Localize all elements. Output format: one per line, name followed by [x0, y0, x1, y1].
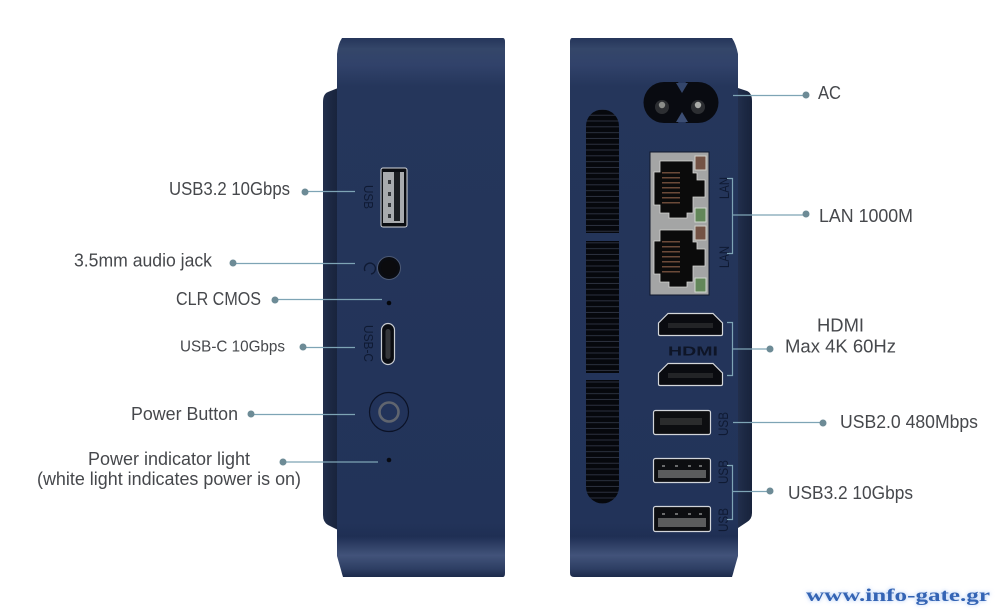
USB 3.2 port top: [654, 458, 710, 482]
rear plate right: [738, 88, 752, 528]
AC socket: [644, 82, 718, 123]
USB-C label: USB-C: [361, 325, 376, 362]
LAN ports: [650, 152, 709, 295]
headphone icon: [364, 263, 375, 274]
USB label: USB: [361, 185, 376, 209]
callout: LAN: [727, 178, 913, 254]
callout: power indicator: (white light indicates power is on): [37, 469, 301, 489]
panel: right side of device: [570, 38, 752, 577]
power button: [370, 392, 408, 432]
HDMI port bottom: [658, 364, 722, 386]
main body left: [337, 38, 505, 577]
power indicator light: [387, 458, 391, 462]
callout: CLR CMOS: CLR CMOS: [176, 289, 261, 309]
USB 2.0 label: USB: [715, 412, 731, 436]
callout: CLR CMOS: [176, 289, 382, 309]
callout: USB3.2 right: [727, 466, 913, 520]
callout: power indicator: Power indicator light: [88, 449, 250, 469]
LAN labels: [716, 177, 732, 268]
callout: USB2.0: [733, 412, 978, 432]
callout: HDMI: [727, 316, 896, 376]
callout: USB3.2 left: USB3.2 10Gbps: [169, 179, 290, 199]
callout: USB3.2 left: [169, 179, 355, 199]
HDMI logo: HDMI: [668, 344, 718, 358]
main body right: [570, 38, 738, 577]
callout: USB2.0: USB2.0 480Mbps: [840, 412, 978, 432]
CLR CMOS hole: [387, 301, 391, 305]
LAN labels: LAN: [716, 246, 732, 268]
callout: LAN: LAN 1000M: [819, 206, 913, 226]
panel: left side of device: [323, 38, 505, 577]
rear plate left: [323, 88, 338, 530]
callout: AC: AC: [818, 83, 841, 103]
watermark: www.info-gate.gr: [806, 585, 990, 605]
callout: USB3.2 right: USB3.2 10Gbps: [788, 483, 913, 503]
callout: power button: [131, 404, 355, 424]
callout: HDMI: HDMI: [817, 316, 864, 336]
callout: audio jack: 3.5mm audio jack: [74, 250, 213, 270]
callout: power indicator: [37, 449, 378, 489]
callout: AC: [733, 83, 841, 103]
USB-A port: [381, 168, 407, 227]
LAN port top: [654, 156, 706, 222]
callout: USB-C: [180, 338, 355, 356]
USB 3.2 label top: USB: [715, 460, 731, 484]
callout: audio jack: [74, 250, 355, 270]
LAN port bottom: [654, 226, 706, 292]
LAN labels: LAN: [716, 177, 732, 199]
callout: HDMI: Max 4K 60Hz: [785, 336, 896, 356]
HDMI port top: [658, 314, 722, 336]
USB-C port: [382, 324, 394, 364]
USB 3.2 port bottom: [654, 506, 710, 532]
callout: power button: Power Button: [131, 404, 238, 424]
audio jack: [378, 256, 400, 280]
air vents: [586, 105, 619, 510]
watermark: www.info-gate.gr: [806, 585, 990, 605]
USB 3.2 label bottom: USB: [715, 508, 731, 532]
callout: USB-C: USB-C 10Gbps: [180, 338, 285, 356]
USB 2.0 port: [654, 410, 710, 434]
